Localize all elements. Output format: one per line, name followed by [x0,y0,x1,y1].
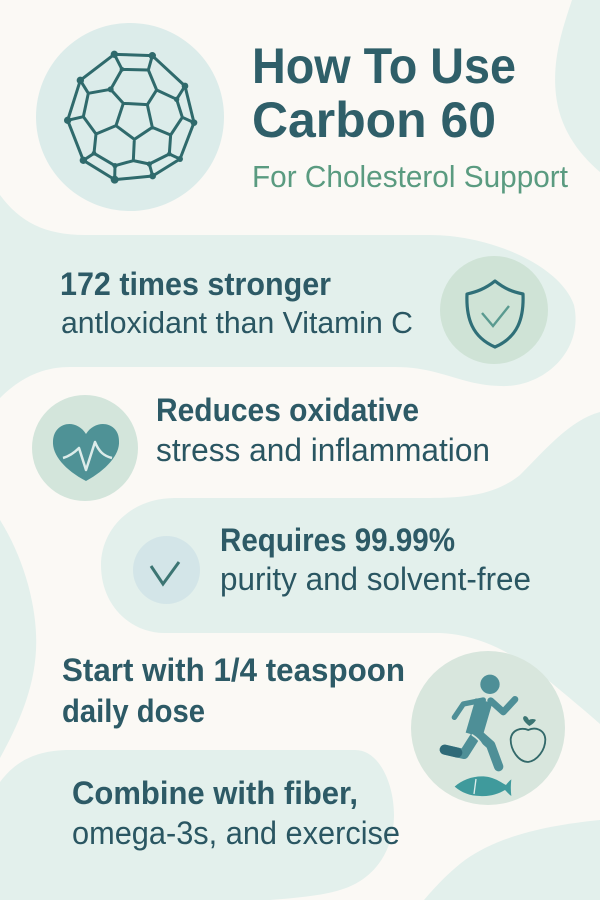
apple [511,729,545,762]
heading: How To Use [252,38,516,94]
panel: purity band [101,412,600,724]
panel: antioxidant band [0,195,576,398]
text: oxidative stress: Reduces oxidative [156,392,419,428]
background blob: bottom right [424,820,600,900]
fish [455,776,511,796]
text: combine with [72,775,400,851]
text: purity [220,522,531,597]
text: combine with: Combine with fiber, [72,775,358,811]
text: antioxidant strength [60,266,413,340]
runner [445,675,515,767]
text: purity: Requires 99.99% [220,522,455,558]
apple leaf [523,716,536,726]
panel: combine band [0,750,394,900]
text: combine with: omega-3s, and exercise [72,815,400,851]
text: purity: purity and solvent-free [220,561,531,597]
icon: check mark [133,536,200,604]
text: starting dose: daily dose [62,693,205,729]
text: oxidative stress [156,392,490,468]
text: oxidative stress: stress and inflammation [156,432,490,468]
text: antioxidant strength: antloxidant than Vitamin C [61,305,413,340]
background blob: left [0,520,36,758]
icon: carbon 60 molecule [36,23,224,211]
subtitle: For Cholesterol Support [252,159,568,194]
text: antioxidant strength: 172 times stronger [60,266,331,302]
heading [252,38,516,148]
background blob: top right [555,0,600,172]
text: starting dose [62,652,405,729]
icon: runner, apple and fish [411,651,565,805]
text: starting dose: Start with 1/4 teaspoon [62,652,405,688]
icon: shield with check [440,256,548,364]
heading: Carbon 60 [252,92,496,148]
icon: heart with pulse [32,395,138,501]
